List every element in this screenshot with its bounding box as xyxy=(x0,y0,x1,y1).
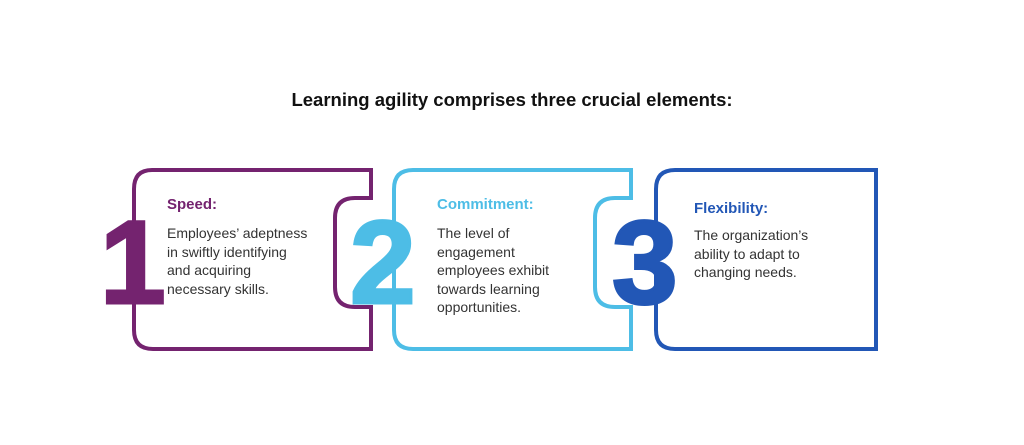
text: flexibility xyxy=(694,227,808,280)
text: commitment: engagement xyxy=(437,244,515,260)
text: commitment: The level of xyxy=(437,225,509,241)
panel: commitment outline xyxy=(394,170,631,349)
heading: commitment: Commitment: xyxy=(437,196,534,213)
text: flexibility: changing needs. xyxy=(694,264,797,280)
text: speed: and acquiring xyxy=(167,262,251,278)
text: commitment: towards learning xyxy=(437,280,540,296)
text: flexibility: The organization’s xyxy=(694,227,808,243)
text: speed: Employees’ adeptness xyxy=(167,225,307,241)
text: commitment: employees exhibit xyxy=(437,262,549,278)
panel: speed outline xyxy=(134,170,371,349)
digit 1: 1 xyxy=(100,197,166,329)
text: commitment xyxy=(437,225,549,315)
text: speed: in swiftly identifying xyxy=(167,244,287,260)
panel: flexibility outline xyxy=(656,170,876,349)
text: commitment: opportunities. xyxy=(437,299,521,315)
heading: flexibility: Flexibility: xyxy=(694,200,768,217)
digit 3: 3 xyxy=(612,197,678,329)
heading: speed: Speed: xyxy=(167,196,217,213)
digit 2: 2 xyxy=(350,197,416,329)
title: Learning agility comprises three crucial elements: xyxy=(291,89,733,110)
text: speed xyxy=(167,225,307,297)
text: flexibility: ability to adapt to xyxy=(694,246,800,262)
text: speed: necessary skills. xyxy=(167,280,269,296)
